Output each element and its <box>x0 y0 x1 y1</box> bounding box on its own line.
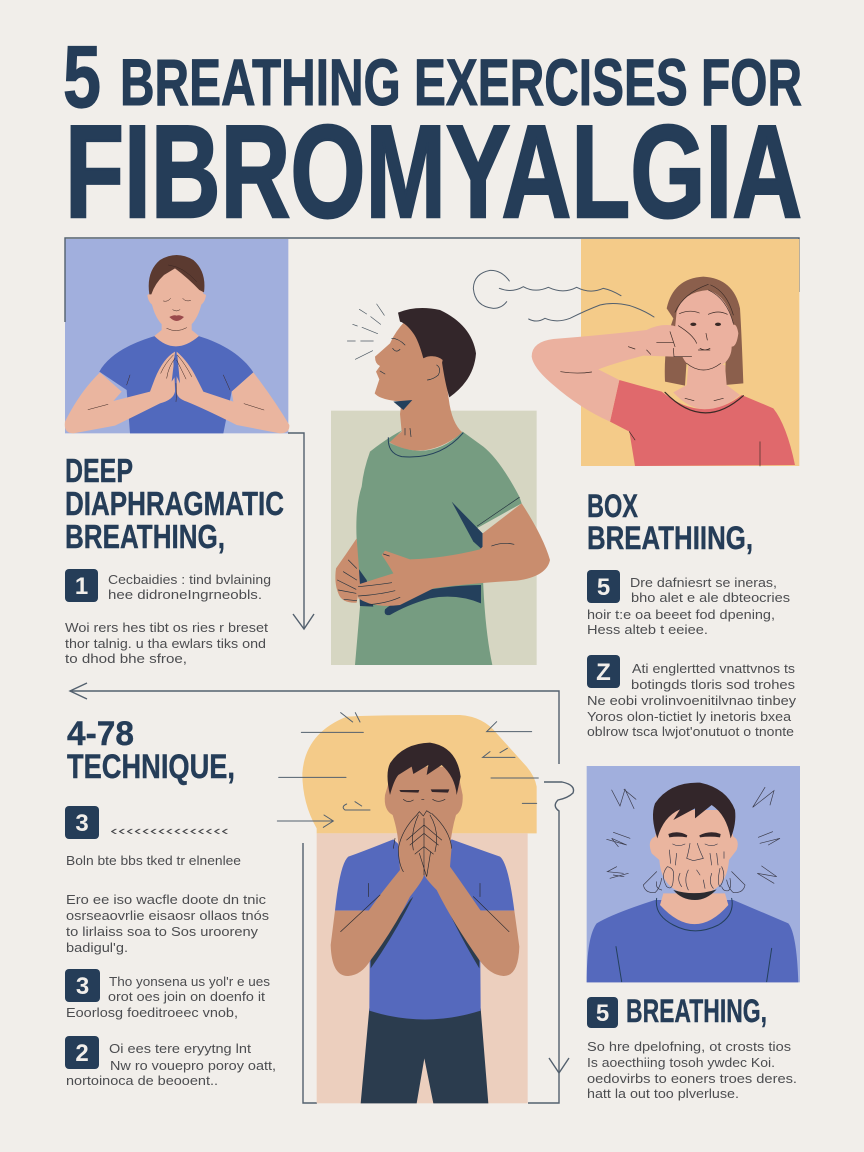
panel: man exhaling through pursed lips <box>587 766 800 982</box>
step 5 text block: Dre dafniesrt se ineras, <box>630 576 777 590</box>
step 3 text block: Boln bte bbs tked tr elnenlee <box>66 854 241 868</box>
step 7 text block: Ne eobi vrolinvoenitilvnao tinbey <box>587 694 797 708</box>
step 2 text block: nortoinoca de beooent.. <box>66 1074 218 1088</box>
step 3 text block: 3 <box>75 810 89 837</box>
step 3 text block: osrseaovrlie eisaosr ollaos tnós <box>66 909 269 923</box>
step 3 second text block <box>65 969 270 1020</box>
heading: deep diaphragmatic breathing: DEEP <box>65 452 133 489</box>
step 7 text block: oblrow tsca lwjot'onutuot o tnonte <box>587 725 794 739</box>
heading and text: step 5 breathing: hatt la out too plverluse. <box>587 1087 739 1101</box>
heading and text: step 5 breathing <box>587 993 797 1101</box>
panel: hands on chest illustration <box>65 239 289 433</box>
step 7 text block <box>587 655 797 739</box>
panel: woman with arm raised to nose <box>532 239 799 466</box>
title <box>63 27 802 245</box>
step 3 text block: Ero ee iso wacfle doote dn tnic <box>66 893 266 907</box>
arrow: connector from right column to left with squiggle <box>70 683 574 1103</box>
step 3 text block <box>65 806 269 955</box>
panel: profile man with hands on belly <box>331 304 550 665</box>
step 7 text block: Ati englertted vnattvnos ts <box>632 662 795 676</box>
heading and text: step 5 breathing: oedovirbs to eoners troes deres. <box>587 1072 797 1086</box>
frame and arrow: top line with left drop <box>65 238 799 629</box>
step 5 text block: Hess alteb t eeiee. <box>587 623 708 637</box>
step 2 text block <box>65 1036 276 1088</box>
step 1 text block <box>65 569 271 666</box>
step 3 text block: to lirlaiss soa to Sos urooreny <box>66 925 259 939</box>
step 1 text block: hee didroneIngrneobls. <box>108 588 262 602</box>
step 5 text block <box>587 570 790 637</box>
step 7 text block: Z <box>596 659 611 686</box>
heading: deep diaphragmatic breathing <box>65 452 284 555</box>
title: 5 <box>63 27 101 126</box>
heading: box breathing: BREATHIING, <box>587 520 753 556</box>
heading and text: step 5 breathing: BREATHING, <box>626 993 767 1029</box>
step 1 text block: Woi rers hes tibt os ries r breset <box>65 621 269 635</box>
breath waves <box>473 270 654 321</box>
step 2 text block: 2 <box>75 1040 89 1067</box>
step 5 text block: bho alet e ale dbteocries <box>631 591 790 605</box>
step 1 text block: to dhod bhe sfroe, <box>65 652 187 666</box>
step 3 second text block: orot oes join on doenfo it <box>108 990 266 1004</box>
heading: box breathing <box>587 488 753 556</box>
step 3 second text block: Tho yonsena us yol'r e ues <box>109 975 270 989</box>
step 5 text block: hoir t:e oa beeet fod dpening, <box>587 608 775 622</box>
step 1 text block: 1 <box>75 573 88 600</box>
panel: man with hands over mouth <box>277 713 538 1103</box>
heading: 4-7-8 technique: 4-78 <box>67 715 134 753</box>
step 7 text block: botingds tloris sod trohes <box>631 678 795 692</box>
step 3 text block: badigul'g. <box>66 941 128 955</box>
step 3 second text block: Eoorlosg foeditroeec vnob, <box>66 1006 238 1020</box>
heading: 4-7-8 technique: TECHNIQUE, <box>67 748 235 786</box>
heading and text: step 5 breathing: 5 <box>596 1000 609 1027</box>
step 7 text block: Yoros olon-tictiet ly inetoris bxea <box>587 710 791 724</box>
heading: 4-7-8 technique <box>67 715 235 786</box>
heading: deep diaphragmatic breathing: BREATHING, <box>65 518 225 555</box>
step 1 text block: thor talnig. u tha ewlars tiks ond <box>65 637 266 651</box>
heading: deep diaphragmatic breathing: DIAPHRAGMATIC <box>65 485 284 522</box>
heading and text: step 5 breathing: So hre dpelofning, ot crosts tios <box>587 1040 791 1054</box>
step 2 text block: Oi ees tere eryytng lnt <box>109 1042 252 1056</box>
step 3 second text block: 3 <box>76 973 89 1000</box>
step 3 text block: ‹‹‹‹‹‹‹‹‹‹‹‹‹‹‹ <box>110 824 229 838</box>
step 1 text block: Cecbaidies : tind bvlaining <box>108 573 271 587</box>
heading: box breathing: BOX <box>587 488 638 524</box>
heading and text: step 5 breathing: Is aoecthiing tosoh ywdec Koi. <box>587 1056 775 1070</box>
step 5 text block: 5 <box>597 574 610 601</box>
step 2 text block: Nw ro vouepro poroy oatt, <box>110 1059 276 1073</box>
